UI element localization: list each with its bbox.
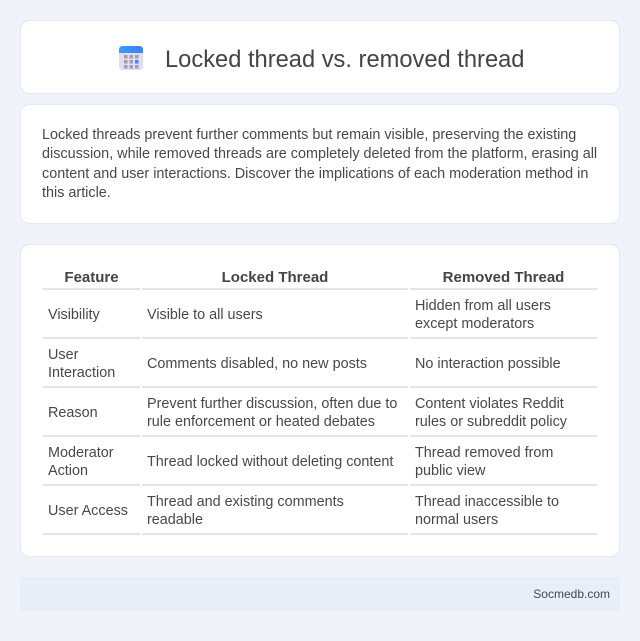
row: User Access: readable bbox=[147, 512, 203, 528]
header: Locked Thread: Locked Thread bbox=[222, 269, 328, 286]
header: Feature: Feature bbox=[64, 269, 119, 286]
row: Reason: Content violates Reddit bbox=[415, 396, 564, 412]
intro paragraph: this article. bbox=[42, 185, 111, 201]
header: Removed Thread: Removed Thread bbox=[443, 269, 564, 286]
row: Visibility: except moderators bbox=[415, 316, 534, 332]
row: Reason: rules or subreddit policy bbox=[415, 414, 567, 430]
row: User Access: Thread and existing comments bbox=[147, 494, 344, 510]
footer credit: Socmedb.com bbox=[533, 587, 610, 601]
row: User Interaction: Interaction bbox=[48, 365, 115, 381]
row: User Access: normal users bbox=[415, 512, 498, 528]
intro paragraph: discussion, while removed threads are completely deleted from the platform, erasing all bbox=[42, 146, 597, 162]
row: User Interaction: No interaction possible bbox=[415, 356, 561, 372]
row: User Access bbox=[48, 494, 559, 528]
title: Locked thread vs. removed thread bbox=[165, 47, 524, 73]
row: User Access: Thread inaccessible to bbox=[415, 494, 559, 510]
row: Reason: Reason bbox=[48, 405, 98, 421]
panel: intro text bbox=[20, 104, 620, 224]
row: Visibility: Visible to all users bbox=[147, 307, 263, 323]
panel: comparison table bbox=[20, 244, 620, 557]
row: User Interaction bbox=[48, 347, 561, 381]
row: Visibility: Hidden from all users bbox=[415, 298, 551, 314]
row: Moderator Action: Thread locked without deleting content bbox=[147, 454, 393, 470]
row: User Access: User Access bbox=[48, 503, 128, 519]
row: Moderator Action bbox=[48, 445, 553, 479]
icon: calendar bbox=[119, 46, 143, 70]
intro paragraph bbox=[42, 127, 597, 201]
row: User Interaction: User bbox=[48, 347, 78, 363]
intro paragraph: Locked threads prevent further comments but remain visible, preserving the existing bbox=[42, 127, 576, 143]
row: Visibility: Visibility bbox=[48, 307, 100, 323]
row: Visibility bbox=[48, 298, 551, 332]
intro paragraph: content and user interactions. Discover the implications of each moderation method in bbox=[42, 166, 588, 182]
row: Reason: rule enforcement or heated debates bbox=[147, 414, 375, 430]
row: Moderator Action: public view bbox=[415, 463, 485, 479]
row: Moderator Action: Action bbox=[48, 463, 88, 479]
row: Moderator Action: Moderator bbox=[48, 445, 114, 461]
row: Reason bbox=[48, 396, 567, 430]
footer bar bbox=[20, 577, 620, 611]
row: Moderator Action: Thread removed from bbox=[415, 445, 553, 461]
panel: title card bbox=[20, 20, 620, 94]
row: Reason: Prevent further discussion, often due to bbox=[147, 396, 397, 412]
row: User Interaction: Comments disabled, no new posts bbox=[147, 356, 367, 372]
